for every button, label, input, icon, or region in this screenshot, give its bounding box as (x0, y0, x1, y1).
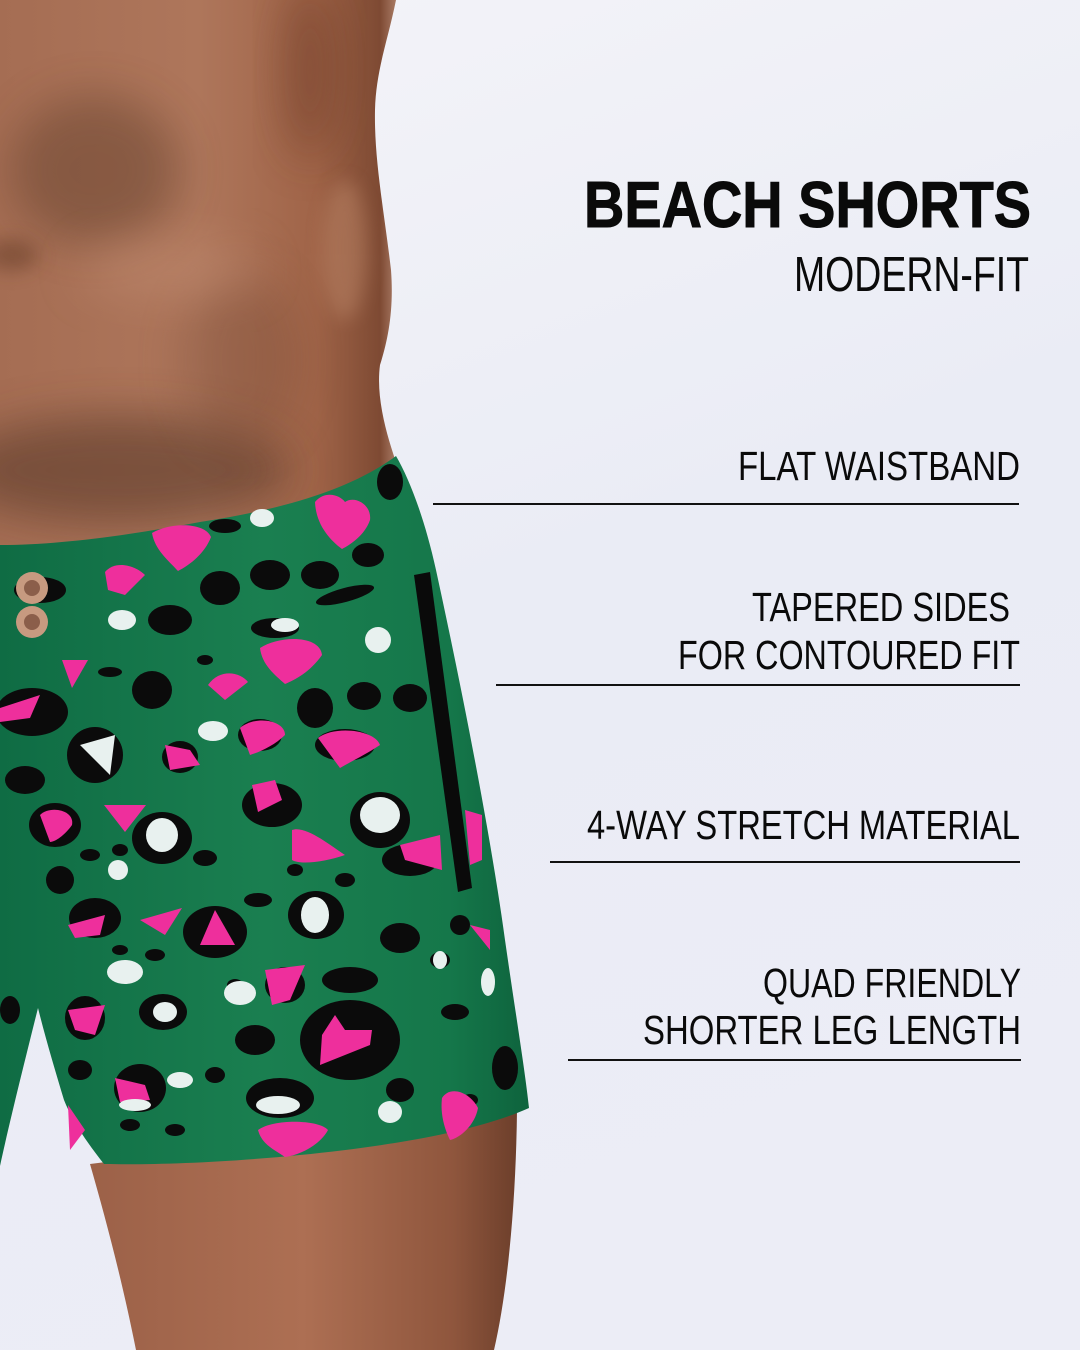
feature: flat waistband: FLAT WAISTBAND (738, 443, 1020, 489)
shorts: white spots (80, 509, 495, 1123)
photo: model torso (0, 0, 396, 600)
shorts: leopard black spots (0, 464, 518, 1136)
feature: tapered sides (496, 584, 1020, 685)
feature: tapered sides: TAPERED SIDES (752, 584, 1010, 630)
photo: model leg (90, 1110, 517, 1350)
beach shorts (0, 456, 529, 1166)
shorts: pink hearts (0, 495, 490, 1157)
shorts: waist buttons (16, 572, 48, 638)
title (584, 168, 1031, 302)
shorts: side zipper pocket (414, 572, 472, 892)
feature: quad friendly (568, 960, 1021, 1060)
